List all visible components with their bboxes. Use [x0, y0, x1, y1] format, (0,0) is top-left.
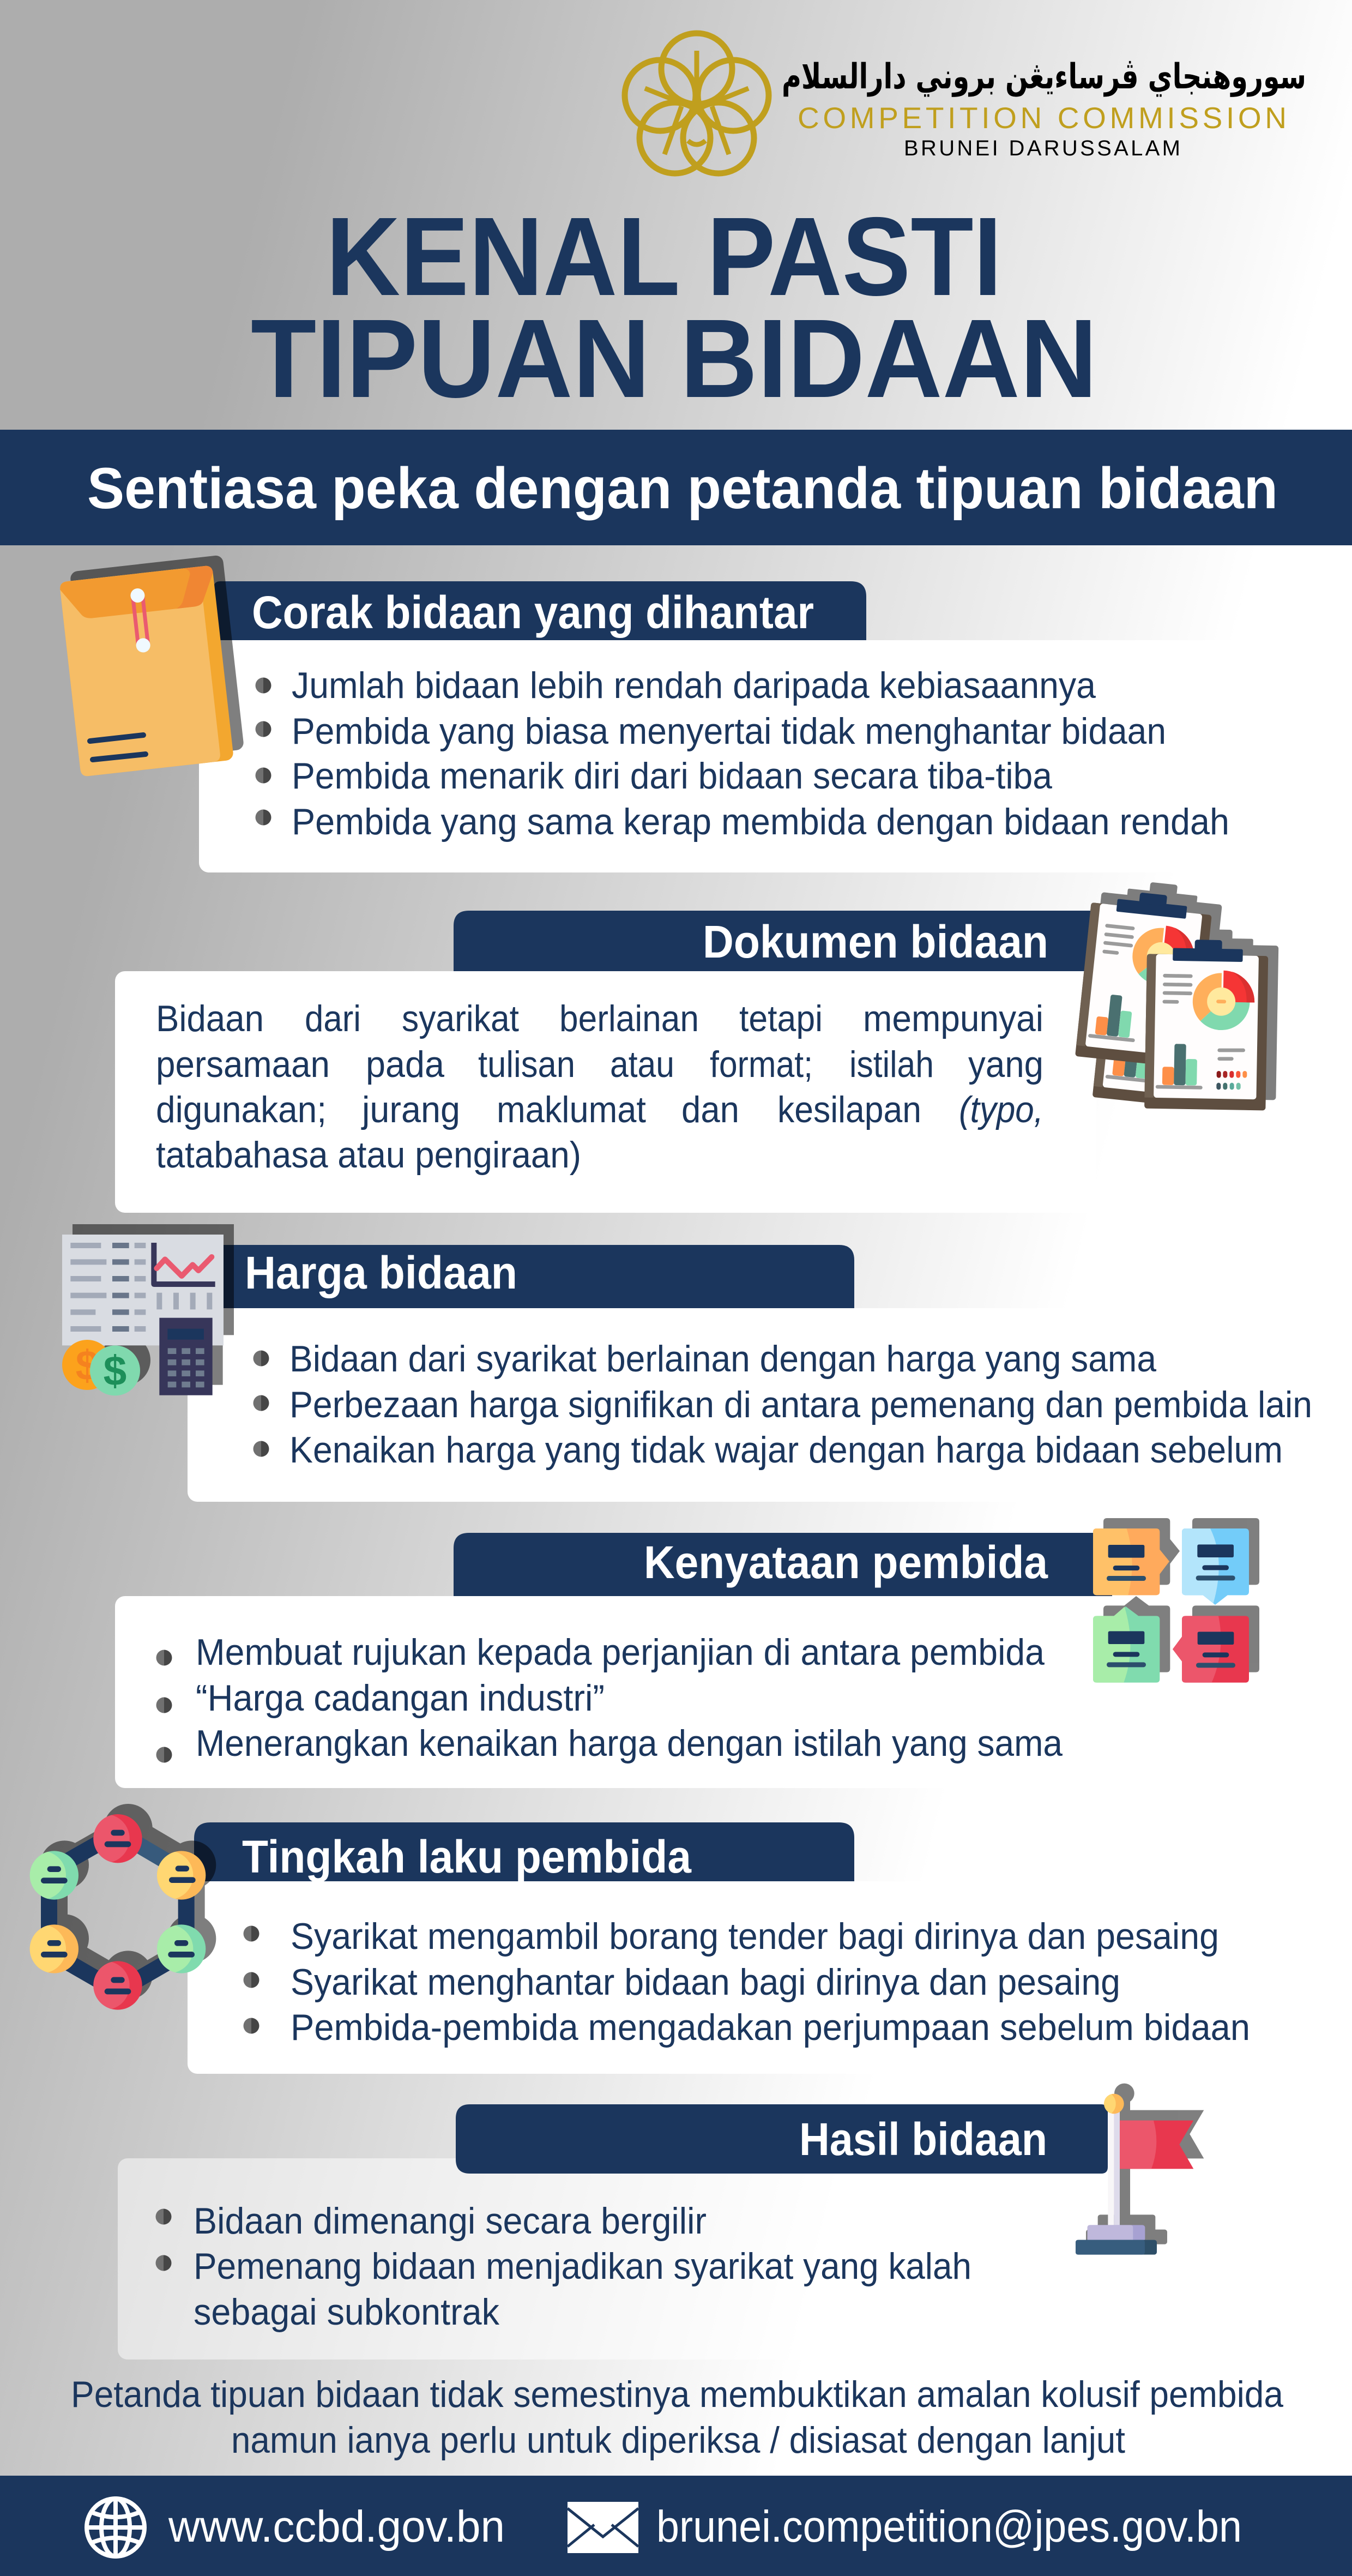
panel: kenyataan pembida: Membuat rujukan kepada perjanjian di antara pembida: [196, 1632, 1045, 1673]
logo country name: BRUNEI DARUSSALAM: [904, 136, 1180, 160]
icon: envelope: [568, 2502, 638, 2553]
panel: dokumen bidaan: berlainan: [559, 998, 699, 1039]
panel: tingkah laku pembida: Pembida-pembida mengadakan perjumpaan sebelum bidaan: [291, 2007, 1250, 2048]
icon: envelope: [59, 555, 244, 777]
panel: dokumen bidaan: [115, 911, 1096, 1213]
panel: harga bidaan: Perbezaan harga signifikan di antara pemenang dan pembida lain: [289, 1384, 1312, 1425]
panel: kenyataan pembida: Kenyataan pembida: [644, 1537, 1048, 1588]
panel: kenyataan pembida: [115, 1533, 1112, 1788]
panel: dokumen bidaan: jurang: [361, 1089, 460, 1130]
icon: calculator, report and coins: $: [104, 1349, 126, 1395]
panel: tingkah laku pembida: Syarikat menghantar bidaan bagi dirinya dan pesaing: [291, 1961, 1120, 2003]
panel: kenyataan pembida: “Harga cadangan industri”: [196, 1677, 605, 1719]
email: brunei.competition@jpes.gov.bn: [656, 2502, 1242, 2551]
panel: dokumen bidaan: persamaan: [156, 1044, 330, 1085]
icon: four speech bubbles: [1093, 1518, 1259, 1683]
panel: hasil bidaan: Hasil bidaan: [799, 2114, 1047, 2165]
panel: corak bidaan yang dihantar: Pembida menarik diri dari bidaan secara tiba-tiba: [292, 755, 1052, 797]
panel: corak bidaan yang dihantar: Corak bidaan yang dihantar: [252, 587, 814, 638]
panel: dokumen bidaan: kesilapan: [777, 1089, 921, 1130]
panel: dokumen bidaan: atau: [610, 1044, 674, 1085]
disclaimer note: [71, 2374, 1283, 2461]
panel: tingkah laku pembida: Syarikat mengambil borang tender bagi dirinya dan pesaing: [291, 1916, 1219, 1957]
panel: dokumen bidaan: yang: [968, 1044, 1043, 1085]
title: KENAL PASTI: [326, 194, 1002, 319]
panel: hasil bidaan: sebagai subkontrak: [194, 2291, 500, 2333]
panel: harga bidaan: Harga bidaan: [245, 1247, 517, 1298]
panel: dokumen bidaan: Dokumen bidaan: [703, 916, 1048, 967]
logo english name: COMPETITION COMMISSION: [798, 101, 1287, 135]
panel: tingkah laku pembida: [188, 1822, 1278, 2074]
panel: dokumen bidaan: dan: [681, 1089, 739, 1130]
icon: flag on stand: [1076, 2084, 1204, 2255]
disclaimer note: Petanda tipuan bidaan tidak semestinya membuktikan amalan kolusif pembida: [71, 2374, 1283, 2415]
panel: hasil bidaan: [118, 2104, 1154, 2360]
icon: clipboards with charts: [1075, 877, 1279, 1110]
logo emblem: [625, 33, 769, 173]
icon: calculator, report and coins: [62, 1224, 234, 1395]
panel: harga bidaan: [188, 1245, 1332, 1502]
panel: tingkah laku pembida: Tingkah laku pembida: [242, 1831, 692, 1882]
panel: dokumen bidaan: mempunyai: [863, 998, 1043, 1039]
panel: dokumen bidaan: (typo,: [959, 1089, 1043, 1130]
disclaimer note: namun ianya perlu untuk diperiksa / disiasat dengan lanjut: [231, 2419, 1125, 2461]
panel: dokumen bidaan: istilah: [849, 1044, 934, 1085]
panel: corak bidaan yang dihantar: Pembida yang sama kerap membida dengan bidaan rendah: [292, 801, 1229, 842]
panel: dokumen bidaan: pada: [366, 1044, 444, 1085]
panel: harga bidaan: Bidaan dari syarikat berlainan dengan harga yang sama: [289, 1338, 1156, 1380]
panel: dokumen bidaan: format;: [710, 1044, 813, 1085]
panel: dokumen bidaan: Bidaan: [156, 998, 264, 1039]
icon: hexagon network: [30, 1804, 216, 2010]
panel: dokumen bidaan: maklumat: [497, 1089, 646, 1130]
panel: dokumen bidaan: dari: [305, 998, 361, 1039]
icon: globe: [87, 2499, 144, 2556]
panel: dokumen bidaan: tulisan: [478, 1044, 575, 1085]
subtitle band: Sentiasa peka dengan petanda tipuan bidaan: [87, 455, 1278, 521]
panel: dokumen bidaan: tetapi: [739, 998, 823, 1039]
website: www.ccbd.gov.bn: [168, 2502, 505, 2551]
panel: kenyataan pembida: Menerangkan kenaikan harga dengan istilah yang sama: [196, 1723, 1063, 1764]
panel: corak bidaan yang dihantar: Pembida yang biasa menyertai tidak menghantar bidaan: [292, 711, 1166, 752]
title: [251, 194, 1097, 421]
panel: corak bidaan yang dihantar: Jumlah bidaan lebih rendah daripada kebiasaannya: [292, 665, 1096, 706]
panel: dokumen bidaan: tatabahasa atau pengiraan): [156, 1134, 581, 1176]
panel: corak bidaan yang dihantar: [199, 581, 1268, 872]
panel: dokumen bidaan: digunakan;: [156, 1089, 327, 1130]
panel: hasil bidaan: Pemenang bidaan menjadikan syarikat yang kalah: [194, 2246, 971, 2287]
panel: dokumen bidaan: syarikat: [402, 998, 519, 1039]
panel: hasil bidaan: Bidaan dimenangi secara bergilir: [194, 2200, 707, 2242]
subtitle band: [0, 430, 1352, 545]
logo: Competition Commission Brunei Darussalam: [625, 33, 1306, 173]
title: TIPUAN BIDAAN: [251, 296, 1097, 421]
icon: calculator, report and coins: $: [76, 1343, 99, 1389]
panel: harga bidaan: Kenaikan harga yang tidak wajar dengan harga bidaan sebelum: [289, 1429, 1283, 1471]
footer band: [0, 2476, 1352, 2576]
